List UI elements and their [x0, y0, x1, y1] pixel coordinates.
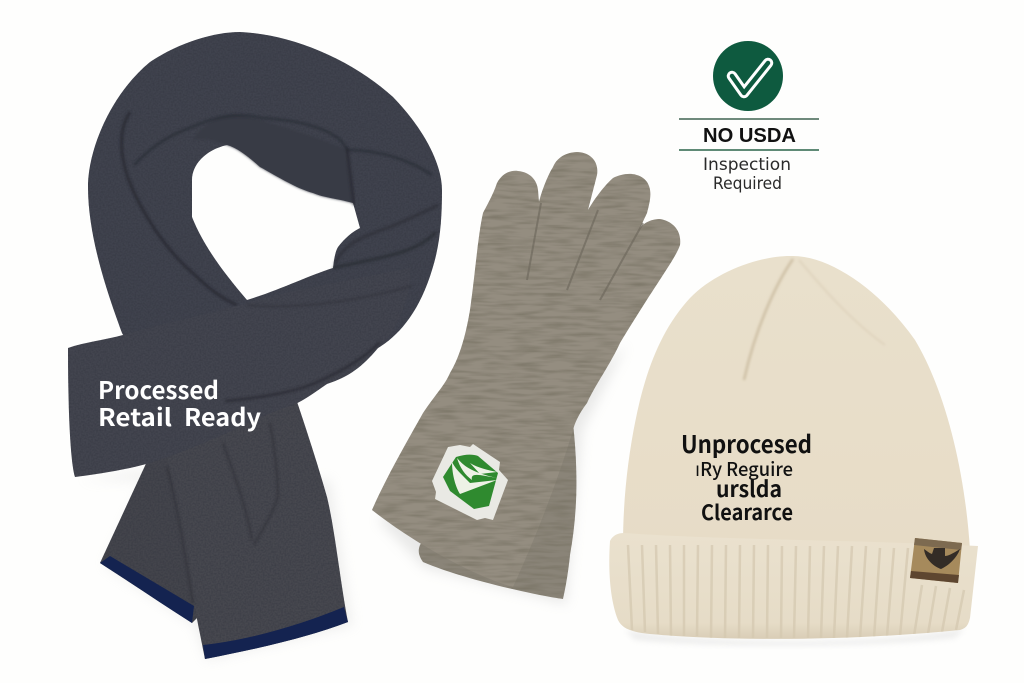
badge: no USDA inspection required [679, 41, 819, 194]
scarf label [98, 371, 261, 433]
badge subtext: Required [713, 174, 782, 194]
beanie label: Cleararce [701, 497, 793, 527]
beanie label [681, 425, 812, 527]
scarf: band crease [225, 342, 380, 401]
badge heading: NO USDA [703, 125, 796, 147]
icon: navy trim left [100, 556, 194, 623]
gloves [372, 152, 680, 604]
beanie cuff [609, 533, 978, 639]
scarf: long crease [122, 112, 237, 305]
scarf: left lower tail [100, 430, 215, 623]
scarf label: Processed [98, 371, 219, 406]
scarf: tail pleats [167, 423, 278, 603]
scarf: right lower tail [167, 390, 348, 659]
leather tag [910, 538, 962, 583]
scarf: inner shaded fold [192, 114, 353, 203]
scarf: soft shadow [80, 470, 352, 660]
scarf label: Ready [184, 398, 261, 433]
icon: navy trim right [203, 607, 348, 659]
beanie: soft shadow [625, 628, 965, 646]
beanie [609, 256, 978, 646]
gloves: soft shadow [378, 345, 626, 604]
back glove [419, 400, 576, 599]
scarf [68, 32, 442, 660]
scarf: front wrap band [68, 268, 410, 477]
badge subtext: Inspection [703, 155, 791, 175]
icon: green label [432, 444, 508, 520]
beanie label: ıRy Reguire [695, 455, 793, 482]
scarf label: Retail [98, 398, 172, 433]
icon: green check [713, 41, 783, 111]
front glove [372, 152, 680, 587]
beanie crown [623, 256, 970, 550]
glove finger seams [527, 203, 643, 300]
beanie label: Unprocesed [681, 425, 812, 460]
badge subtext [703, 155, 791, 194]
beanie label: urslda [716, 472, 782, 504]
scarf: main loop [88, 32, 442, 373]
beanie seams [744, 259, 793, 380]
